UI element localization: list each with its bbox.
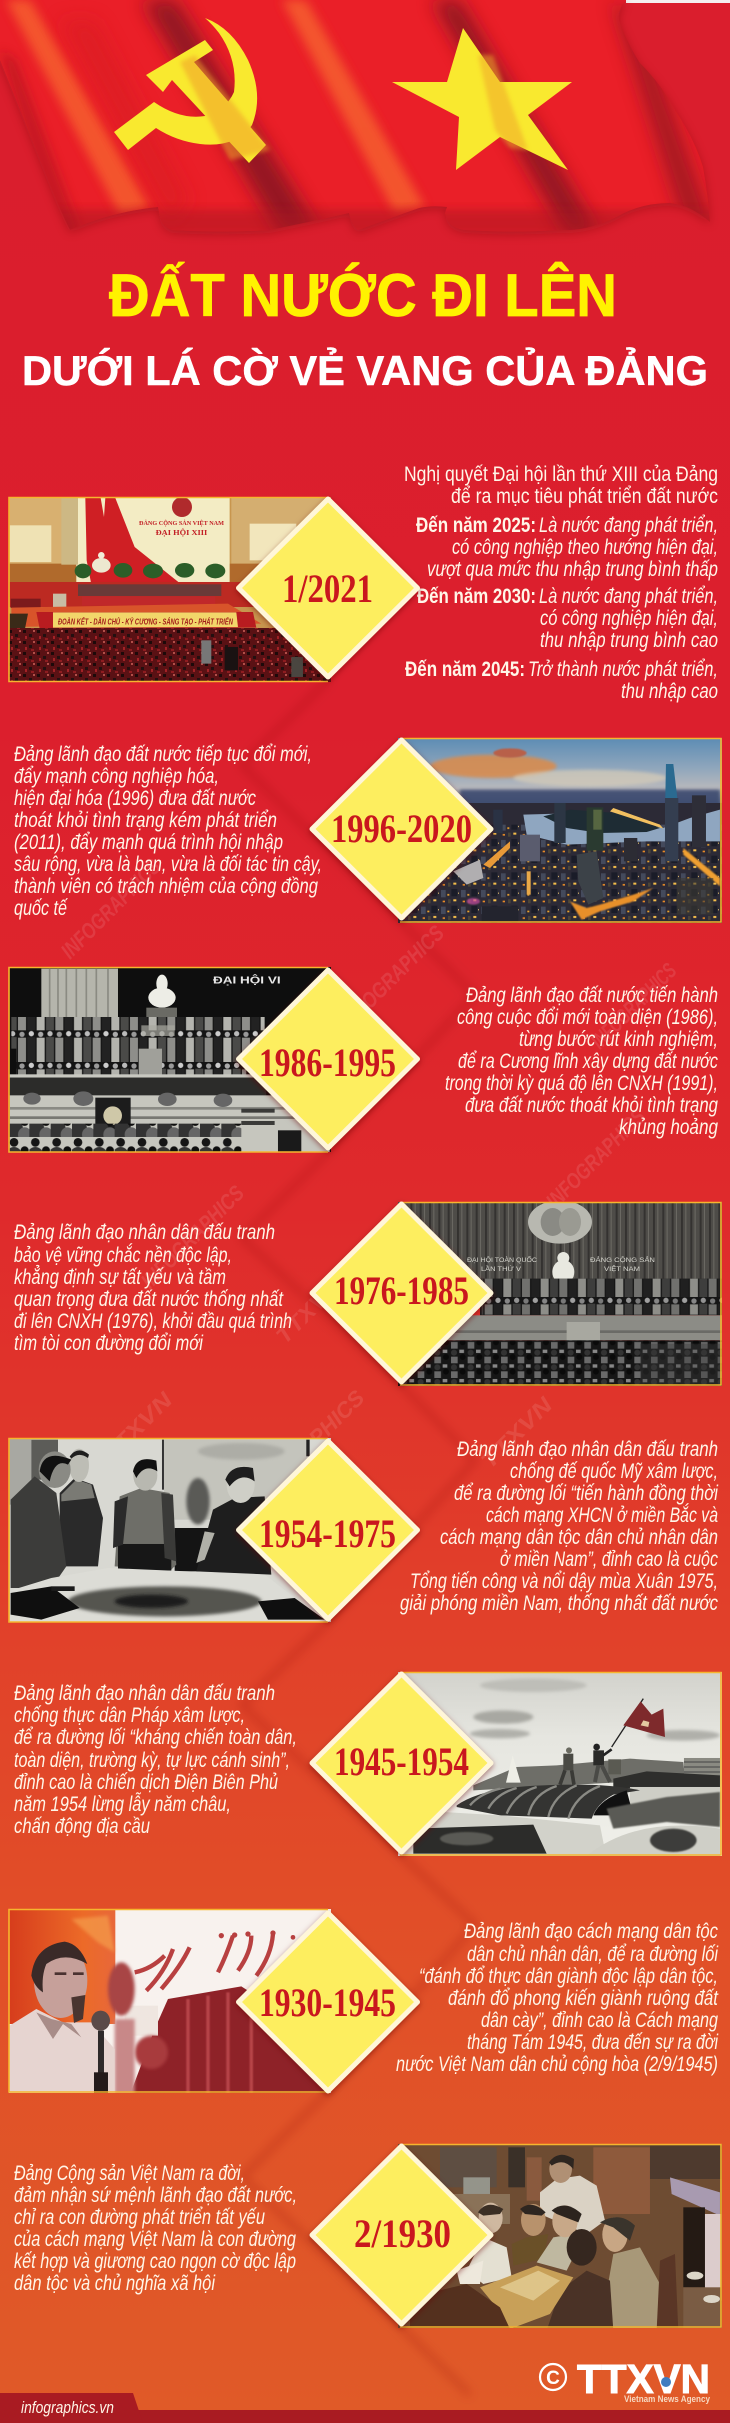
photo border (9, 498, 328, 682)
diamond (238, 1441, 418, 1619)
photo border (9, 1438, 328, 1622)
year label: 2/1930 (354, 2211, 451, 2256)
diamond (312, 1204, 491, 1382)
text block: 2/1930: kết hợp và giương cao ngọn cờ độc lập (14, 2250, 296, 2273)
title (22, 262, 708, 394)
diamond (238, 499, 418, 677)
text block: 1930-1945 (396, 1920, 719, 2076)
text block: 1976-1985: bảo vệ vững chắc nền độc lập, (14, 1244, 232, 1267)
watermarks: TTXVN (476, 1391, 558, 1474)
year label: 1976-1985 (334, 1268, 469, 1313)
diamond (238, 970, 418, 1148)
logo: TTXVN: Vietnam News Agency (624, 2394, 711, 2405)
standing man (540, 2176, 605, 2234)
footer bar (0, 2393, 730, 2423)
bunker dome (457, 1785, 640, 1819)
text block: goals 1/2021: Đến năm 2025: (416, 514, 536, 537)
panel: 1945-1954 (312, 1672, 723, 1859)
panel: 1/2021 (8, 497, 418, 684)
text block: 2/1930: của cách mạng Việt Nam là con đường (14, 2228, 296, 2251)
text block: 2/1930: Đảng Cộng sản Việt Nam ra đời, (14, 2162, 245, 2185)
map table (19, 1568, 190, 1588)
diamond (312, 740, 491, 918)
text block: 2/1930 (14, 2162, 297, 2295)
watermarks: INFOGRAPHICS (336, 920, 449, 1034)
soldiers (593, 1750, 604, 1765)
background zigzag fold (242, 680, 475, 2395)
photo: Dien Bien Phu (398, 1672, 723, 1859)
photo: 5th congress: VIỆT NAM (604, 1264, 640, 1273)
title line 1: ĐẤT NƯỚC ĐI LÊN (109, 262, 617, 329)
photo border (400, 1672, 721, 1855)
panel: 1976-1985 (312, 1200, 723, 1387)
text block: 2/1930: chỉ ra con đường phát triển tất yếu (14, 2206, 265, 2229)
photo: founding conference painting (398, 2144, 723, 2331)
figure: man 4 (196, 1496, 271, 1575)
text block: 2/1930: đảm nhận sứ mệnh lãnh đạo đất nước, (14, 2184, 297, 2207)
photo: 5th congress: LẦN THỨ V (481, 1263, 522, 1273)
text block: 1996-2020: thoát khỏi tình trạng kém phát triển (14, 809, 277, 832)
figure: man 2 (60, 1478, 103, 1566)
text block: 1996-2020 (14, 743, 322, 920)
photo border (400, 1202, 721, 1385)
map table (480, 2266, 573, 2329)
photo: 6th congress (8, 967, 331, 1154)
icon: star (392, 28, 572, 170)
text block: 1945-1954: chống thực dân Pháp xâm lược, (14, 1704, 245, 1727)
year label: 1996-2020 (331, 806, 472, 851)
diamond (238, 1913, 418, 2091)
watermarks: INFOGRAPHICS (541, 1104, 651, 1214)
year label: 1986-1995 (259, 1040, 396, 1085)
text block: 1996-2020: (2011), đẩy mạnh quá trình hội nhập (14, 831, 283, 854)
photo: 13th congress: ĐẢNG CỘNG SẢN VIỆT NAM (139, 519, 225, 527)
mountains (473, 1759, 685, 1790)
tent (506, 1767, 521, 1783)
diamond (312, 1674, 491, 1852)
icon: copyright (540, 2364, 566, 2390)
text block: 1976-1985: tìm tòi con đường đổi mới (14, 1332, 204, 1355)
text block: goals 1/2021 (404, 463, 718, 703)
photo: city skyline (398, 738, 723, 925)
text block: 1996-2020: quốc tế (14, 897, 68, 920)
rocks (607, 1792, 720, 1829)
flag (612, 1699, 643, 1747)
text block: 1976-1985 (14, 1221, 292, 1355)
icon: hammer and sickle (114, 18, 270, 163)
text block: 2/1930: dân tộc và chủ nghĩa xã hội (14, 2272, 216, 2295)
figure: portrait (10, 2009, 115, 2096)
photo border (400, 2144, 721, 2327)
photo border (400, 738, 721, 922)
congress party emblem (172, 497, 192, 517)
watermarks: INFOGRAPHICS (586, 958, 681, 1054)
ground (400, 1812, 607, 1859)
photo border (9, 968, 328, 1152)
photo border (9, 1910, 328, 2092)
panel: 1996-2020 (312, 738, 723, 925)
text block: 1996-2020: đẩy mạnh công nghiệp hóa, (14, 765, 219, 788)
text block: goals 1/2021: Đến năm 2045: (405, 658, 525, 681)
text block: 1976-1985: khẳng định sự tất yếu và tầm (14, 1266, 226, 1289)
watermarks: TTXVN — VNA (271, 1211, 409, 1349)
panel: 2/1930 (312, 2144, 723, 2331)
text block: 1945-1954: đỉnh cao là chiến dịch Điện Biên Phủ (14, 1771, 278, 1794)
text block: 1996-2020: thành viên có trách nhiệm của cộng đồng (14, 875, 318, 898)
text block: 1945-1954: chấn động địa cầu (14, 1815, 150, 1838)
text block: 1996-2020: Đảng lãnh đạo đất nước tiếp tục đổi mới, (14, 743, 312, 766)
text block: 1945-1954: năm 1954 lừng lẫy năm châu, (14, 1793, 231, 1816)
title line 2: DƯỚI LÁ CỜ VẺ VANG CỦA ĐẢNG (22, 346, 708, 394)
flag banner (0, 0, 730, 240)
figure: man 1 (11, 1476, 66, 1588)
photo: 5th congress: ĐẢNG CỘNG SẢN (590, 1255, 655, 1264)
photo: 13th congress: ĐOÀN KẾT - DÂN CHỦ - KỶ CƯƠNG - SÁNG TẠO - PHÁT TRIỂN (58, 617, 233, 626)
top-right white sliver (626, 0, 730, 3)
text block: 1945-1954: để ra đường lối “kháng chiến toàn dân, (14, 1726, 297, 1749)
watermarks: INFOGRAPHICS (56, 854, 166, 964)
panel: 1986-1995 (8, 967, 418, 1154)
source text: infographics.vn (21, 2398, 114, 2417)
text block: 1945-1954: toàn diện, trường kỳ, tự lực cánh sinh”, (14, 1749, 290, 1772)
panel: 1930-1945 (8, 1909, 418, 2096)
photo: 13th congress (8, 497, 333, 684)
text block: 1976-1985: đi lên CNXH (1976), khởi đầu quá trình (14, 1310, 292, 1333)
year label: 1/2021 (282, 566, 373, 611)
microphone (98, 2030, 104, 2072)
fireplace right (670, 2177, 720, 2216)
photo: commanders at map table (8, 1438, 331, 1625)
diamond (312, 2146, 491, 2324)
icon: globe (661, 2377, 671, 2387)
photo: 6th congress: ĐẠI HỘI VI (213, 974, 281, 987)
text block: 1996-2020: sâu rộng, vừa là bạn, vừa là đối tác tin cậy, (14, 853, 322, 876)
year label: 1930-1945 (259, 1980, 396, 2025)
river (523, 810, 720, 845)
watermarks: RAPHICS (281, 1385, 369, 1474)
red curtain (130, 1986, 328, 2096)
photo: 13th congress: ĐẠI HỘI XIII (156, 528, 207, 537)
watermarks (56, 854, 681, 1474)
year label: 1945-1954 (334, 1739, 469, 1784)
text block: 1986-1995 (445, 984, 718, 1139)
text block: 1976-1985: Đảng lãnh đạo nhân dân đấu tranh (14, 1221, 275, 1244)
watermarks: TTXVN (96, 1386, 178, 1469)
logo: TTXVN: TTXVN (577, 2356, 710, 2402)
text block: 1996-2020: hiện đại hóa (1996) đưa đất nước (14, 787, 256, 810)
seated men (467, 2237, 512, 2284)
text block: 1945-1954 (14, 1682, 297, 1838)
photo: 5th congress: ĐẠI HỘI TOÀN QUỐC (467, 1254, 537, 1264)
watermarks: INFOGRAPHICS (136, 1180, 249, 1294)
icon: copyright: C (546, 2368, 560, 2389)
text block: 1954-1975 (400, 1438, 719, 1615)
bunting (135, 1934, 273, 1991)
photo: President Ho Chi Minh (8, 1909, 331, 2096)
photo: 5th congress (398, 1200, 723, 1387)
figure: man 3 (115, 1488, 176, 1570)
text block: goals 1/2021: Đến năm 2030: (417, 585, 536, 608)
text block: 1945-1954: Đảng lãnh đạo nhân dân đấu tranh (14, 1682, 275, 1705)
text block: 1976-1985: quan trọng đưa đất nước thống nhất (14, 1288, 284, 1311)
year label: 1954-1975 (259, 1511, 396, 1556)
panel: 1954-1975 (8, 1438, 418, 1625)
